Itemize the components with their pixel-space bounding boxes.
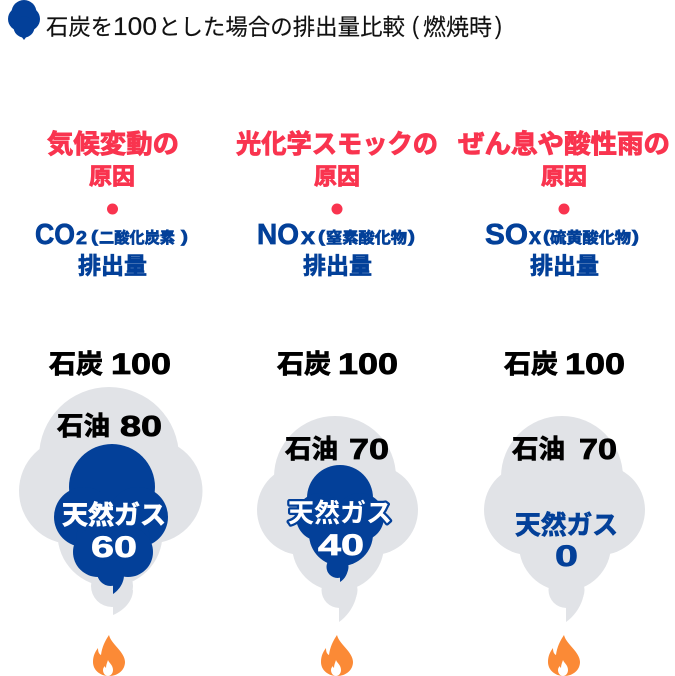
value: coal 100 <box>277 348 398 381</box>
label: natural gas 40 <box>288 498 392 562</box>
label: oil 70 <box>512 434 617 466</box>
label: SOx emissions: SO <box>485 219 528 251</box>
label: SOx emissions: 硫黄酸化物 <box>550 229 631 247</box>
label: natural gas 40: 天然ガス <box>288 498 392 528</box>
label: CO2 emissions <box>35 219 188 278</box>
heading: smog cause: 原因 <box>314 163 360 189</box>
cloud: oil 70 <box>484 416 645 622</box>
heading: climate change cause: 気候変動の <box>47 129 179 159</box>
panel: climate change CO2 <box>19 129 202 676</box>
heading: acid rain cause: ぜん息や酸性雨の <box>458 129 670 159</box>
label: natural gas 60: 60 <box>91 531 137 564</box>
label: NOx emissions: ( <box>318 227 325 246</box>
label: CO2 emissions: 排出量 <box>78 252 147 278</box>
heading: acid rain cause <box>458 129 670 189</box>
title: ) <box>495 12 502 40</box>
label: oil 70: 70 <box>349 434 389 466</box>
panel: photochemical smog NOx <box>236 129 438 676</box>
icon: heading smoke cloud <box>8 0 40 40</box>
title <box>46 12 502 41</box>
title: 燃焼時 <box>423 14 492 40</box>
value: coal 100: 100 <box>111 348 171 381</box>
label: CO2 emissions: 2 <box>76 228 87 248</box>
label: NOx emissions <box>257 219 415 278</box>
value: coal 100 <box>504 348 625 381</box>
label: NOx emissions: 窒素酸化物 <box>326 229 407 247</box>
label: natural gas 0: 0 <box>555 540 578 573</box>
label: oil 70 <box>285 434 389 466</box>
cloud: oil 80 <box>19 387 202 615</box>
label: NOx emissions: ) <box>408 227 415 246</box>
label: oil 70: 70 <box>579 434 617 466</box>
value: coal 100 <box>49 348 171 381</box>
label: oil 80 <box>57 411 162 443</box>
label: CO2 emissions: 二酸化炭素 <box>99 229 175 247</box>
value: coal 100: 100 <box>338 348 398 381</box>
label: CO2 emissions: ) <box>181 227 188 246</box>
title: とした場合の排出量比較 <box>158 15 405 40</box>
label: SOx emissions: x <box>529 223 541 249</box>
value: coal 100: 石炭 <box>49 349 103 379</box>
label: natural gas 0 <box>515 510 618 573</box>
cloud: natural gas 60 <box>54 444 168 594</box>
title: 石炭を <box>46 15 113 40</box>
label: SOx emissions <box>485 219 639 278</box>
dot <box>107 204 118 214</box>
label: oil 80: 80 <box>120 411 162 443</box>
dot <box>558 204 570 214</box>
label: NOx emissions: x <box>301 223 315 249</box>
value: coal 100: 石炭 <box>277 349 331 379</box>
cloud: oil 70 <box>257 416 418 622</box>
label: natural gas 0: 天然ガス <box>515 510 618 540</box>
label: NOx emissions: NO <box>257 219 299 251</box>
label: SOx emissions: ( <box>543 227 550 246</box>
heading: climate change cause <box>47 129 179 189</box>
label: natural gas 40: 40 <box>318 529 364 562</box>
cloud: natural gas 40 <box>296 465 384 582</box>
icon: flame <box>321 635 353 676</box>
value: coal 100: 100 <box>565 348 625 381</box>
icon: flame <box>548 635 580 676</box>
label: oil 70: 石油 <box>285 434 338 464</box>
label: oil 70: 石油 <box>512 434 565 464</box>
label: natural gas 60 <box>62 500 166 564</box>
title: ( <box>412 12 420 40</box>
heading: climate change cause: 原因 <box>89 163 135 189</box>
panel: acid rain SOx <box>458 129 670 676</box>
label: SOx emissions: 排出量 <box>530 252 599 278</box>
heading: acid rain cause: 原因 <box>541 163 587 189</box>
label: SOx emissions: ) <box>632 227 639 246</box>
label: oil 80: 石油 <box>57 411 110 441</box>
label: NOx emissions: 排出量 <box>303 252 372 278</box>
label: CO2 emissions: ( <box>91 227 98 246</box>
label: CO2 emissions: CO <box>35 219 75 251</box>
value: coal 100: 石炭 <box>504 349 558 379</box>
heading: smog cause: 光化学スモックの <box>236 129 438 159</box>
icon: flame <box>93 635 125 676</box>
label: natural gas 60: 天然ガス <box>62 500 166 530</box>
heading: smog cause <box>236 129 438 189</box>
dot <box>332 204 342 214</box>
title: 100 <box>113 13 157 41</box>
